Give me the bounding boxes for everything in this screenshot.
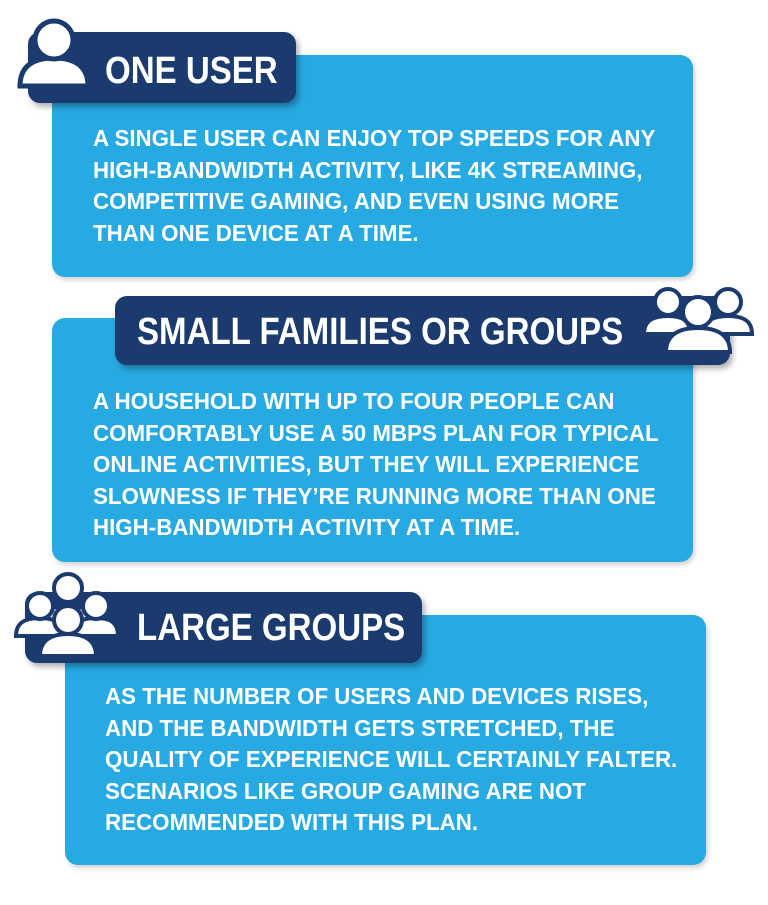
text: large groups body: SCENARIOS LIKE GROUP GAMING ARE NOT — [105, 778, 586, 804]
text: one user body — [93, 125, 655, 246]
icon: large group — [14, 572, 116, 654]
icon: group of three — [646, 287, 754, 354]
text: large groups body: AND THE BANDWIDTH GETS STRETCHED, THE — [105, 714, 614, 740]
text: small families body: HIGH-BANDWIDTH ACTIVITY AT A TIME. — [93, 514, 520, 540]
text: small families body: ONLINE ACTIVITIES, BUT THEY WILL EXPERIENCE — [93, 451, 639, 477]
text: small families body: SLOWNESS IF THEY’RE RUNNING MORE THAN ONE — [93, 482, 656, 508]
heading: one user: ONE USER — [105, 50, 278, 92]
text: large groups body — [105, 683, 677, 835]
text: large groups body: QUALITY OF EXPERIENCE WILL CERTAINLY FALTER. — [105, 746, 677, 772]
text: small families body: COMFORTABLY USE A 50 MBPS PLAN FOR TYPICAL — [93, 420, 659, 446]
icon: single user — [18, 18, 86, 88]
text: small families body — [93, 388, 659, 540]
header: small families — [115, 296, 730, 365]
panel: one user — [52, 55, 693, 277]
header: one user — [28, 32, 296, 103]
text: one user body: HIGH-BANDWIDTH ACTIVITY, LIKE 4K STREAMING, — [93, 156, 642, 182]
text: large groups body: RECOMMENDED WITH THIS PLAN. — [105, 809, 478, 835]
heading: large groups: LARGE GROUPS — [137, 607, 405, 649]
text: one user body: COMPETITIVE GAMING, AND EVEN USING MORE — [93, 188, 619, 214]
text: small families body: A HOUSEHOLD WITH UP TO FOUR PEOPLE CAN — [93, 388, 614, 414]
panel: large groups — [65, 615, 706, 865]
header: large groups — [25, 592, 422, 663]
panel: small families — [52, 318, 693, 562]
text: one user body: A SINGLE USER CAN ENJOY TOP SPEEDS FOR ANY — [93, 125, 655, 151]
text: one user body: THAN ONE DEVICE AT A TIME. — [93, 220, 419, 246]
heading: small families: SMALL FAMILIES OR GROUPS — [137, 311, 623, 353]
text: large groups body: AS THE NUMBER OF USERS AND DEVICES RISES, — [105, 683, 648, 709]
